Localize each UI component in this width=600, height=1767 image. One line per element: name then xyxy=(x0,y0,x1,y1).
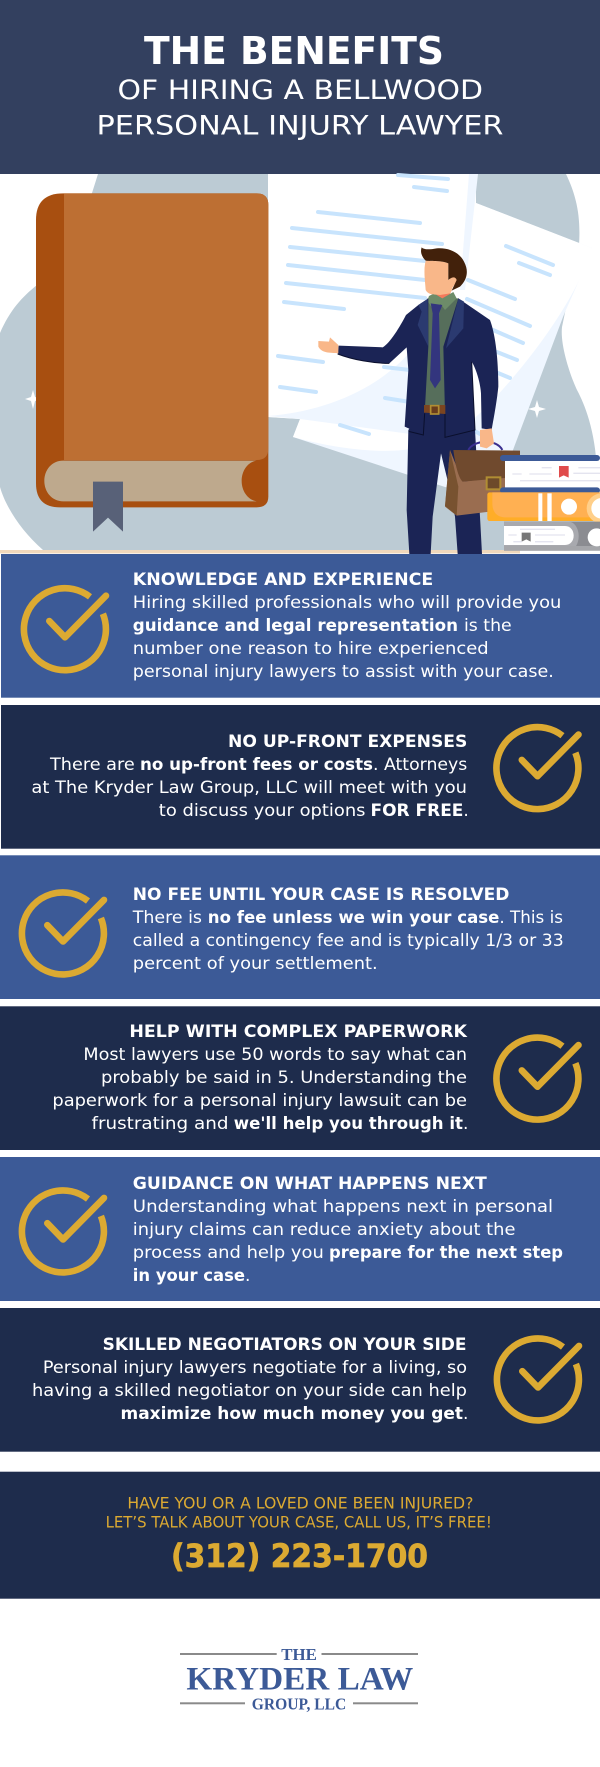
heading: GUIDANCE ON WHAT HAPPENS NEXT xyxy=(133,1174,487,1194)
text block xyxy=(32,1358,468,1424)
text block: . xyxy=(463,1404,468,1424)
man in suit xyxy=(318,247,520,554)
orange book xyxy=(487,492,600,523)
text block: injury claims can reduce anxiety about the xyxy=(133,1220,516,1240)
call to action text: HAVE YOU OR A LOVED ONE BEEN INJURED? xyxy=(127,1494,473,1513)
title: THE BENEFITS xyxy=(144,29,444,74)
text block: to discuss your options xyxy=(159,801,366,821)
background blob xyxy=(0,174,597,550)
text block: . Attorneys xyxy=(373,755,467,775)
stacked books xyxy=(487,455,600,551)
text block: Personal injury lawyers negotiate for a living, so xyxy=(43,1358,467,1378)
panel: call to action footer xyxy=(0,1472,600,1599)
hero illustration xyxy=(0,174,600,554)
heading: SKILLED NEGOTIATORS ON YOUR SIDE xyxy=(103,1335,466,1355)
icon: gold check circle xyxy=(496,727,578,809)
large closed book xyxy=(36,193,268,532)
text block: . This is xyxy=(499,908,563,928)
heading: NO FEE UNTIL YOUR CASE IS RESOLVED xyxy=(133,885,509,905)
title: PERSONAL INJURY LAWYER xyxy=(96,110,504,142)
phone number: (312) 223-1700 xyxy=(171,1537,428,1575)
panel: skilled negotiators xyxy=(0,1308,600,1452)
text block: number one reason to hire experienced xyxy=(133,639,489,659)
text block: no fee unless we win your case xyxy=(208,908,499,928)
text block xyxy=(133,593,561,682)
title xyxy=(96,29,504,142)
logo: The Kryder Law Group xyxy=(180,1645,418,1713)
text block: Understanding what happens next in personal xyxy=(133,1197,553,1217)
papers xyxy=(268,174,592,495)
text block: no up-front fees or costs xyxy=(140,755,373,775)
text block: There are xyxy=(49,755,135,775)
call to action text: LET’S TALK ABOUT YOUR CASE, CALL US, IT’S FREE! xyxy=(106,1513,492,1532)
text block: maximize how much money you get xyxy=(120,1404,463,1424)
text block: guidance and legal representation xyxy=(133,616,458,636)
text block: Hiring skilled professionals who will provide you xyxy=(133,593,561,613)
panel: help with complex paperwork xyxy=(0,1006,600,1150)
text block: having a skilled negotiator on your side can help xyxy=(32,1381,467,1401)
grey book xyxy=(504,522,600,551)
icon: gold check circle xyxy=(22,1190,104,1272)
top book xyxy=(500,455,600,493)
icon: gold check circle xyxy=(22,892,104,974)
logo: The Kryder Law Group: GROUP, LLC xyxy=(252,1694,346,1713)
panel: knowledge and experience xyxy=(1,554,600,698)
text block xyxy=(133,1197,563,1286)
trousers xyxy=(407,410,482,554)
text block: is the xyxy=(464,616,512,636)
title: OF HIRING A BELLWOOD xyxy=(118,75,483,106)
panel: guidance on what happens next xyxy=(0,1157,600,1301)
briefcase xyxy=(445,450,520,516)
text block: . xyxy=(463,801,469,821)
text block: . xyxy=(245,1266,250,1286)
text block: . xyxy=(463,1114,468,1134)
logo: The Kryder Law Group: KRYDER LAW xyxy=(186,1661,413,1697)
text block: FOR FREE xyxy=(370,801,463,821)
text block xyxy=(52,1045,468,1134)
text block: probably be said in 5. Understanding the xyxy=(101,1068,467,1088)
heading: KNOWLEDGE AND EXPERIENCE xyxy=(133,570,433,590)
logo: The Kryder Law Group: THE xyxy=(281,1645,317,1664)
text block: There is xyxy=(132,908,202,928)
icon: sparkle right xyxy=(528,400,546,418)
panel: no up-front expenses xyxy=(1,705,600,849)
icon: gold check circle xyxy=(24,588,106,670)
text block: we'll help you through it xyxy=(234,1114,463,1134)
text block: percent of your settlement. xyxy=(133,954,378,974)
icon: gold check circle xyxy=(496,1038,578,1120)
header banner xyxy=(0,0,600,174)
panel: no fee until resolved xyxy=(0,855,600,999)
text block: paperwork for a personal injury lawsuit can be xyxy=(52,1091,467,1111)
icon: gold check circle xyxy=(497,1338,579,1420)
text block: frustrating and xyxy=(92,1114,228,1134)
text block: called a contingency fee and is typically 1/3 or 33 xyxy=(133,931,564,951)
text block: Most lawyers use 50 words to say what can xyxy=(83,1045,467,1065)
text block: process and help you xyxy=(133,1243,324,1263)
text block xyxy=(31,755,469,821)
strip under illustration xyxy=(0,550,520,553)
icon: sparkle left xyxy=(25,390,42,409)
text block: prepare for the next step xyxy=(329,1243,563,1263)
text block xyxy=(132,908,564,974)
text block: in your case xyxy=(133,1266,245,1286)
heading: HELP WITH COMPLEX PAPERWORK xyxy=(129,1022,468,1042)
heading: NO UP-FRONT EXPENSES xyxy=(228,732,467,752)
text block: at The Kryder Law Group, LLC will meet with you xyxy=(31,778,467,798)
text block: personal injury lawyers to assist with your case. xyxy=(133,662,554,682)
call to action text xyxy=(106,1494,492,1532)
